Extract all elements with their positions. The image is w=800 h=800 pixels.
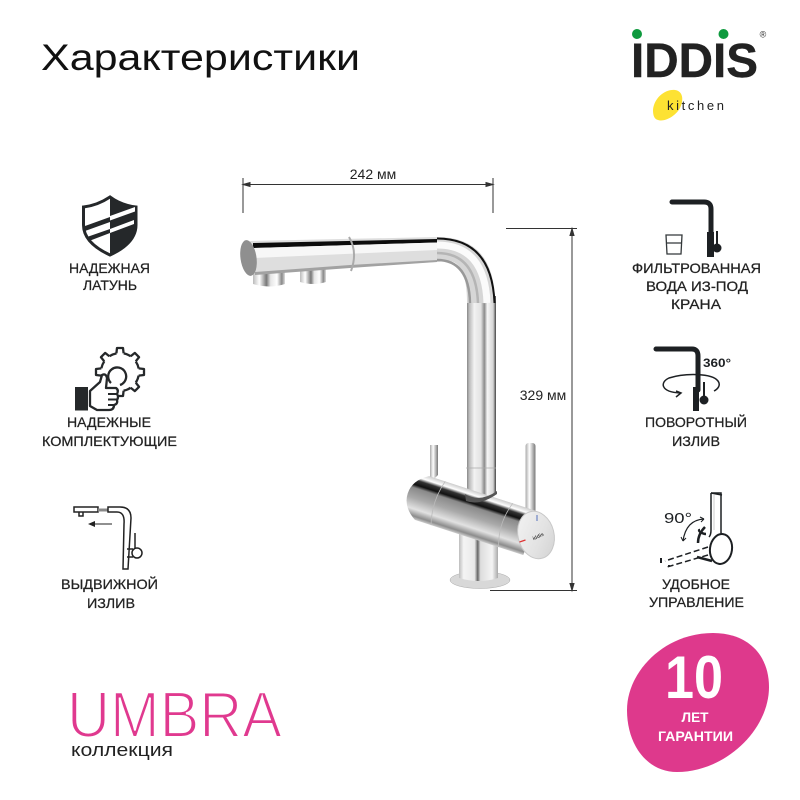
- warranty badge: [627, 633, 769, 772]
- dimension: width 242 mm: [243, 166, 493, 213]
- end disc: [513, 507, 559, 563]
- icon: shield: [84, 197, 136, 255]
- label: НАДЕЖНАЯ: [69, 260, 150, 276]
- label: НАДЕЖНЫЕ: [67, 414, 151, 430]
- feature: выдвижной излив: [61, 507, 158, 611]
- logo registered mark: ®: [760, 30, 767, 40]
- badge text: ЛЕТ: [682, 709, 709, 725]
- label: ИЗЛИВ: [672, 433, 720, 449]
- label: ВОДА ИЗ-ПОД: [646, 278, 749, 294]
- 360 degrees: 360°: [703, 358, 731, 370]
- logo yellow blob: [653, 90, 682, 120]
- feature: фильтрованная вода: [632, 202, 761, 312]
- collection label: коллекция: [71, 740, 173, 760]
- right lever: [526, 443, 536, 518]
- width label: 242 мм: [350, 166, 396, 182]
- disc brand: iddis: [532, 532, 545, 542]
- base disc: [450, 572, 510, 588]
- disc red mark: [520, 540, 526, 542]
- collection name: [67, 678, 283, 760]
- aerators: [253, 265, 285, 286]
- label: УПРАВЛЕНИЕ: [649, 594, 744, 610]
- label: УДОБНОЕ: [662, 576, 730, 592]
- label: ПОВОРОТНЫЙ: [645, 413, 747, 430]
- elbow: [437, 237, 495, 303]
- 90 degrees: 90°: [664, 510, 692, 527]
- feature: надежная латунь: [69, 197, 150, 293]
- column collar: [465, 491, 497, 502]
- label: ФИЛЬТРОВАННАЯ: [632, 260, 761, 276]
- title: Характеристики: [41, 37, 360, 78]
- icon: pull-out faucet: [74, 507, 142, 569]
- disc blue mark: [536, 515, 538, 521]
- feature: поворотный излив: [645, 349, 747, 449]
- feature: удобное управление: [649, 493, 744, 610]
- label: ИЗЛИВ: [87, 595, 135, 611]
- badge number: 10: [665, 644, 723, 711]
- base stem: [459, 527, 498, 581]
- barrel body: [401, 471, 538, 555]
- logo kitchen: kitchen: [667, 98, 724, 113]
- spout end cap: [238, 239, 259, 277]
- feature: надежные комплектующие: [42, 348, 177, 449]
- vertical column: [467, 296, 496, 500]
- label: ВЫДВИЖНОЙ: [61, 575, 158, 592]
- label: ЛАТУНЬ: [83, 277, 137, 293]
- label: КОМПЛЕКТУЮЩИЕ: [42, 433, 177, 449]
- left lever: [430, 445, 438, 483]
- badge blob: [627, 633, 769, 772]
- icon: thumb and gear: [75, 348, 144, 410]
- spout seam: [349, 237, 354, 271]
- umbra heading: UMBRA: [67, 678, 283, 751]
- logo: IDDIS kitchen: [631, 29, 767, 120]
- icon: black faucet with glass: [666, 202, 722, 257]
- height label: 329 мм: [520, 387, 566, 403]
- label: КРАНА: [671, 296, 722, 312]
- dimension: height 329 mm: [490, 228, 577, 590]
- logo wordmark: IDDIS: [631, 34, 758, 88]
- badge text: ГАРАНТИИ: [658, 728, 733, 744]
- horizontal spout: [250, 237, 437, 275]
- logo green dots: [632, 29, 728, 39]
- faucet illustration: [238, 237, 559, 588]
